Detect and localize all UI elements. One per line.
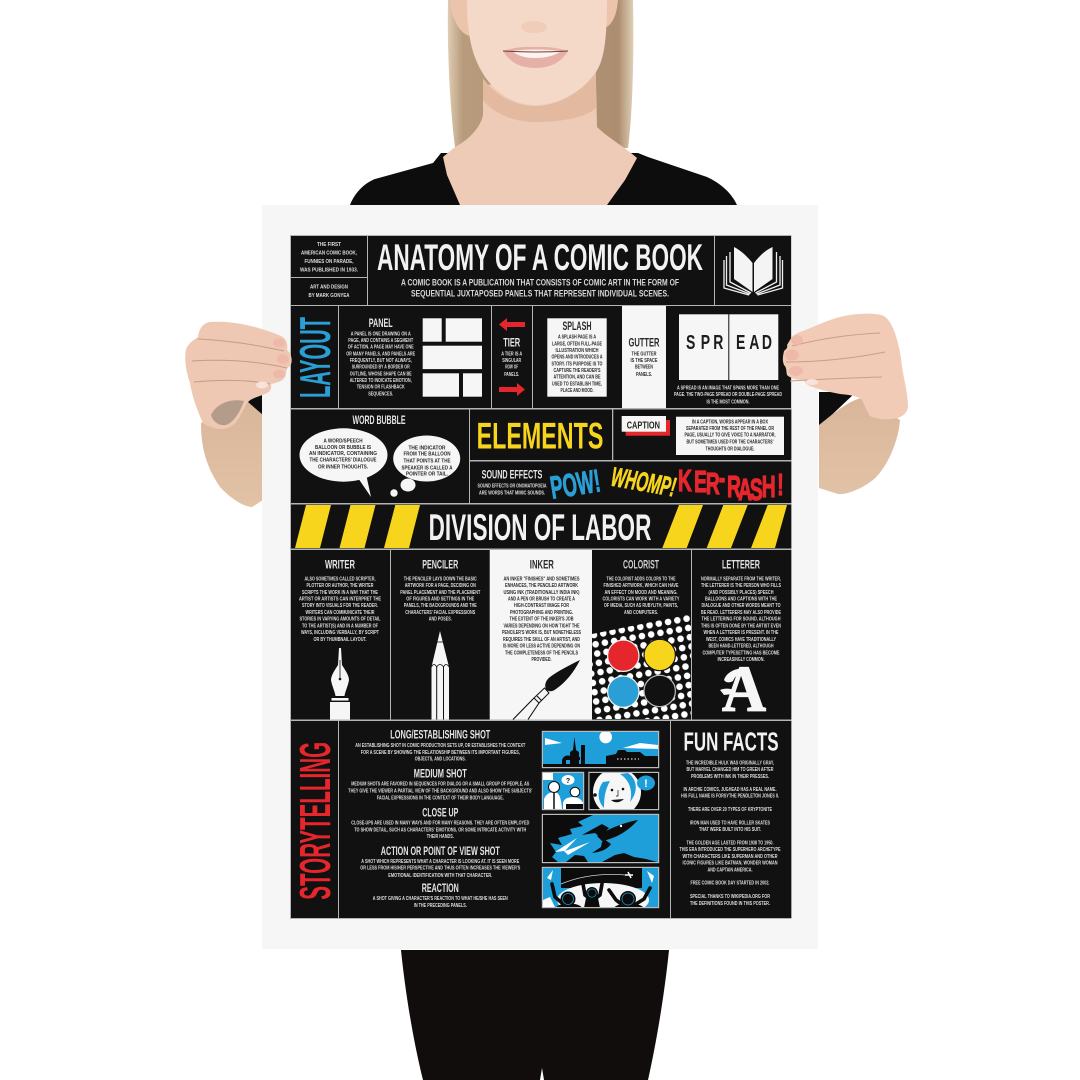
column: colorist: FINISHED ARTWORK, WHICH CAN HAVE: [604, 583, 679, 589]
shot: reaction: A SHOT GIVING A CHARACTER'S REACTION TO WHAT HE/SHE HAS SEEN: [373, 896, 508, 902]
layout: panel definition: SEQUENCES.: [368, 391, 393, 397]
header: first comic note: THE FIRST: [317, 242, 341, 248]
column: inker: IS MORE OR LESS ACTIVE DEPENDING ON: [503, 644, 580, 650]
column: writer: ALSO SOMETIMES CALLED SCRIPTER,: [304, 576, 376, 582]
subtitle: SEQUENTIAL JUXTAPOSED PANELS THAT REPRESENT INDIVIDUAL SCENES.: [411, 289, 669, 300]
elements: sound effects: [470, 462, 791, 507]
WHOMP: WHOMP!: [609, 462, 678, 503]
column: inker: THE COMPLETENESS OF THE PENCILS: [505, 650, 578, 656]
column: writer: WRITERS CAN COMMUNICATE THEIR: [306, 610, 374, 616]
header: first comic note: AMERICAN COMIC BOOK,: [301, 250, 357, 256]
layout: splash definition: ILLUSTRATION WHICH: [556, 348, 598, 354]
fun facts list: HIS FULL NAME IS FORSYTHE PENDLETON JONES II.: [681, 794, 779, 800]
storytelling: side label: [291, 721, 340, 918]
comic panel: astronaut close-up: [593, 773, 655, 809]
column: writer: TO THE ARTIST(S) AND IN A NUMBER OF: [302, 623, 378, 629]
layout: panel definition: OUTLINE, WHOSE SHAPE CAN BE: [350, 371, 412, 377]
column: colorist: [592, 550, 691, 720]
shot: long/establishing: FOR A SCENE BY SHOWING THE RELATIONSHIP BETWEEN ITS IMPORTANT FIGURES,: [361, 750, 520, 756]
column: letterer: [692, 550, 791, 726]
header: credit: [291, 278, 367, 305]
thought bubble: THE INDICATOR: [408, 445, 446, 451]
shot: reaction: [373, 883, 508, 909]
column: letterer: WHEN A LETTERER IS PRESENT. IN THE: [704, 630, 779, 636]
model: shirt: [350, 153, 737, 205]
shot: close up: TO SHOW DETAIL, SUCH AS CHARACTERS' EMOTIONS, OR SOME INTRICATE ACTIVITY WITH: [354, 827, 526, 833]
layout: spread definition: PAGE. THE TWO-PAGE SPREAD OR DOUBLE-PAGE SPREAD: [674, 392, 782, 398]
fun facts list: THE GOLDEN AGE LASTED FROM 1938 TO 1950.: [686, 840, 774, 846]
column: writer: STORIES IN VARYING AMOUNTS OF DETAIL: [300, 617, 381, 623]
layout: gutter definition: [622, 306, 666, 408]
column: letterer: THIS IS OFTEN DONE BY THE ARTIST EVEN: [701, 623, 781, 629]
poster grid frame: [290, 235, 792, 919]
column: letterer: THE LETTERER IS THE PERSON WHO FILLS: [701, 583, 781, 589]
elements: heading: [470, 410, 612, 460]
layout: splash definition: CAPTURE THE READER'S: [554, 368, 601, 374]
fun facts heading: FUN FACTS: [684, 727, 778, 757]
thought bubble: THAT POINTS AT THE: [404, 458, 451, 464]
layout: splash definition: SPLASH: [562, 321, 592, 333]
layout: tier definition: TIER: [503, 338, 521, 350]
speech bubble: OR INNER THOUGHTS.: [318, 465, 368, 471]
shot: medium: MEDIUM SHOTS ARE FAVORED IN SEQUENCES FOR DIALOG OR A SMALL GROUP OF PEOPLE, AS: [351, 782, 529, 788]
elements: word bubble panel: [291, 410, 469, 503]
column: inker: THE EXTENT OF THE INKER'S JOB: [510, 617, 574, 623]
column: letterer: INCREASINGLY COMMON.: [718, 657, 765, 663]
elements: word bubble panel: WORD BUBBLE: [352, 415, 406, 427]
shot: long/establishing: LONG/ESTABLISHING SHOT: [390, 729, 490, 741]
layout: tier definition: A TIER IS A: [501, 351, 522, 357]
halftone dots: [592, 614, 691, 720]
column: penciler: AND POSES.: [429, 617, 452, 623]
division of labor banner: [291, 504, 791, 548]
header: first comic note: [291, 236, 367, 277]
layout: gutter definition: THE GUTTER: [632, 351, 656, 357]
icon: panel layout: [423, 318, 482, 397]
shot: action or point of view: [360, 846, 520, 879]
column: inker: VARIES DEPENDING ON HOW TIGHT THE: [504, 623, 580, 629]
header: credit: ART AND DESIGN: [310, 284, 348, 290]
fun facts list: PROBLEMS WITH INK IN THEIR PRESSES.: [691, 774, 769, 780]
shot: long/establishing: OBJECTS, AND LOCATIONS.: [415, 756, 466, 762]
elements: heading: ELEMENTS: [477, 415, 603, 456]
column: letterer: DIALOGUE AND OTHER WORDS MEANT TO: [702, 603, 781, 609]
fun facts list: THAT WERE BUILT INTO HIS SUIT.: [699, 827, 761, 833]
column: letterer: BALLOONS AND CAPTIONS WITH THE: [705, 596, 777, 602]
elements: caption: IN A CAPTION, WORDS APPEAR IN A BOX: [692, 419, 768, 425]
layout: tier definition: PANELS.: [504, 372, 519, 378]
column: inker: REQUIRES THE SKILL OF AN ARTIST, AND: [503, 637, 580, 643]
fun facts list: SPECIAL THANKS TO WIKIPEDIA.ORG FOR: [690, 894, 770, 900]
fun facts list: THIS ERA INTRODUCED THE SUPERHERO ARCHETYPE: [680, 847, 781, 853]
column: colorist: THE COLORIST ADDS COLORS TO THE: [606, 576, 676, 582]
layout: gutter definition: BETWEEN: [635, 365, 653, 371]
column: letterer: THE LETTERING FOR SOUND, ALTHOUGH: [702, 617, 780, 623]
layout: splash definition: LARGE, OFTEN FULL-PAGE: [552, 341, 602, 347]
fun facts list: IRON MAN USED TO HAVE ROLLER SKATES: [690, 820, 770, 826]
comic panel: mission control: [543, 773, 583, 809]
poster sheet: [262, 205, 818, 949]
header: credit: BY MARK GONYEA: [308, 293, 350, 299]
shot: medium: MEDIUM SHOT: [414, 769, 467, 781]
layout: panel definition: PANEL: [369, 318, 393, 330]
column: penciler: [391, 550, 490, 720]
speech bubble: [300, 428, 388, 497]
layout: spread definition: A SPREAD IS AN IMAGE THAT SPANS MORE THAN ONE: [677, 385, 779, 391]
column: inker: PROVIDED.: [532, 657, 552, 663]
fun facts panel: [671, 721, 791, 918]
header: title panel: [368, 236, 714, 305]
icon: ink circles: [608, 639, 675, 707]
column: penciler: OF FIGURES AND SETTINGS IN THE: [406, 596, 474, 602]
model: hair: [448, 0, 633, 148]
shot: action or point of view: EMOTIONAL IDENTIFICATION WITH THAT CHARACTER.: [388, 873, 493, 879]
layout: panel definition: ALTERED TO INDICATE EMOTION,: [350, 378, 412, 384]
layout: side label: [291, 306, 340, 408]
layout: panel definition: TENSION OR FLASHBACK: [357, 385, 405, 391]
shot: action or point of view: ACTION OR POINT OF VIEW SHOT: [381, 846, 500, 858]
shot: medium: FACIAL EXPRESSIONS IN THE CONTEXT OF THEIR BODY LANGUAGE.: [377, 796, 504, 802]
comic panel: astronaut close-up: !: [644, 778, 648, 790]
column: penciler: PANEL PLACEMENT AND THE PLACEMENT: [400, 590, 481, 596]
division of labor banner: DIVISION OF LABOR: [429, 507, 651, 548]
layout: panel definition: A PANEL IS ONE DRAWING ON A: [351, 331, 411, 337]
column: writer: WAYS, INCLUDING VERBALLY, BY SCRIPT: [301, 630, 379, 636]
layout: spread definition: SPR: [686, 330, 724, 354]
column: writer: ARTIST OR ARTISTS CAN INTERPRET THE: [299, 596, 381, 602]
layout: splash definition: USED TO ESTABLISH TIME,: [552, 381, 602, 387]
elements: caption: CAPTION: [627, 419, 660, 431]
column: letterer: NORMALLY SEPARATE FROM THE WRITER,: [701, 576, 781, 582]
shot: reaction: REACTION: [422, 883, 459, 895]
storytelling: shots and comic strip: [339, 721, 670, 918]
thought bubble: POINTER OR TAIL.: [406, 472, 448, 478]
layout: splash definition: STORY. ITS PURPOSE IS TO: [552, 361, 603, 367]
thought bubble: FROM THE BALLOON: [404, 452, 450, 458]
speech bubble: THE CHARACTERS' DIALOGUE: [310, 458, 377, 464]
model: right hand: [783, 314, 908, 419]
thought bubble: [390, 436, 460, 497]
elements: sound effects: SOUND EFFECTS OR ONOMATOPOEIA: [478, 484, 546, 490]
layout: panel definition: PAGE, AND CONTAINS A SEGMENT: [348, 338, 414, 344]
speech bubble: A WORD/SPEECH: [324, 438, 362, 444]
column: letterer: LETTERER: [722, 559, 760, 571]
layout: gutter definition: GUTTER: [628, 338, 660, 350]
layout: panel definition: FREQUENTLY, BUT NOT ALWAYS,: [350, 358, 412, 364]
column: inker: PHOTOGRAPHING AND PRINTING.: [510, 610, 573, 616]
column: colorist: COLORISTS CAN WORK WITH A VARIETY: [602, 596, 680, 602]
fun facts list: WITH CHARACTERS LIKE SUPERMAN AND OTHER: [682, 854, 778, 860]
elements: caption: THOUGHTS OR DIALOGUE.: [706, 446, 755, 452]
column: inker: ENHANCES, THE PENCILED ARTWORK: [505, 583, 578, 589]
header: first comic note: WAS PUBLISHED IN 1933.: [300, 268, 358, 274]
fun facts list: BUT MARVEL CHANGED HIM TO GREEN AFTER: [686, 767, 774, 773]
layout: tier definition: [492, 306, 532, 408]
column: letterer: WEST, COMICS HAVE TRADITIONALLY: [706, 637, 776, 643]
column: inker: PENCILER'S WORK IS, BUT NONETHELESS: [502, 630, 581, 636]
fun facts list: AND CAPTAIN AMERICA.: [708, 868, 753, 874]
layout: side label: LAYOUT: [291, 317, 340, 398]
layout: panel definition: SURROUNDED BY A BORDER OR: [352, 365, 410, 371]
layout: spread definition: [666, 306, 791, 408]
column: penciler: PENCILER: [422, 559, 459, 571]
column: inker: USING INK (TRADITIONALLY INDIA INK): [504, 590, 580, 596]
shot: close up: [351, 808, 529, 840]
icon: pencil: [432, 631, 449, 720]
fun facts list: THE DEFINITIONS FOUND IN THIS POSTER.: [690, 901, 770, 907]
column: writer: OR BY THUMBNAIL LAYOUT.: [314, 637, 367, 643]
layout: panel definition: OR MANY PANELS, AND PANELS ARE: [346, 351, 415, 357]
layout: splash definition: [533, 306, 622, 408]
shot: long/establishing: [355, 729, 526, 762]
layout: spread definition: IS THE MOST COMMON.: [706, 400, 750, 406]
layout: splash definition: ATTENTION, AND CAN BE: [554, 375, 601, 381]
subtitle: A COMIC BOOK IS A PUBLICATION THAT CONSISTS OF COMIC ART IN THE FORM OF: [401, 278, 679, 288]
fun facts list: THE INCREDIBLE HULK WAS ORIGINALLY GRAY,: [686, 760, 774, 766]
arrow: left: [499, 318, 525, 331]
comic panel: crowd reaction: [543, 868, 658, 907]
model: face: [450, 0, 618, 105]
layout: tier definition: SINGULAR: [502, 358, 521, 364]
column: colorist: AN EFFECT ON MOOD AND MEANING.: [604, 590, 678, 596]
column: letterer: (AND POSSIBLY PLACES) SPEECH: [708, 590, 774, 596]
elements: sound effects: ARE WORDS THAT MIMIC SOUNDS.: [479, 490, 545, 496]
model: right arm: [819, 392, 900, 494]
comic panel: rocket in flight: [543, 815, 658, 862]
fun facts list: FREE COMIC BOOK DAY STARTED IN 2002.: [690, 881, 770, 887]
column: colorist: COLORIST: [623, 559, 659, 571]
layout: panel definition: [339, 306, 491, 408]
elements: caption: PAGE, USUALLY TO GIVE VOICE TO A NARRATOR,: [684, 433, 776, 439]
shot: medium: THEY GIVE THE VIEWER A PARTIAL VIEW OF THE BACKGROUND AND ALSO SHOW THE SUBJECTS': [348, 789, 533, 795]
model: left hand: [185, 322, 292, 429]
speech bubble: AN INDICATOR, CONTAINING: [309, 451, 377, 457]
icon: brush: [513, 660, 580, 720]
column: letterer: COMPUTER TYPESETTING HAS BECOME: [702, 650, 780, 656]
column: inker: INKER: [530, 559, 554, 571]
shot: action or point of view: OR LESS FROM HIS/HER PERSPECTIVE AND THUS OFTEN INCREASES THE VIEWER'S: [360, 866, 520, 872]
column: penciler: CHARACTERS' FACIAL EXPRESSIONS: [405, 610, 475, 616]
model: neck and chest: [443, 72, 637, 205]
column: letterer: BEEN HAND-LETTERED, ALTHOUGH: [708, 644, 774, 650]
shot: close up: CLOSE-UPS ARE USED IN MANY WAYS AND FOR MANY REASONS. THEY ARE OFTEN EMPLOYED: [351, 820, 529, 826]
column: penciler: PANELS, THE BACKGROUNDS AND THE: [404, 603, 477, 609]
layout: gutter definition: PANELS.: [636, 372, 652, 378]
column: writer: STORY INTO VISUALS FOR THE READER.: [302, 603, 378, 609]
layout: spread definition: EAD: [736, 330, 772, 354]
column: writer: SCRIPTS THE WORK IN A WAY THAT THE: [302, 590, 378, 596]
comic panel: rocket launch site: [543, 732, 658, 764]
header: open book icon: [715, 236, 791, 305]
column: inker: AN INKER "FINISHES" AND SOMETIMES: [504, 576, 580, 582]
POW: POW!: [548, 462, 603, 506]
speech bubble: BALLOON OR BUBBLE IS: [315, 445, 371, 451]
column: letterer: BE READ. LETTERERS MAY ALSO PROVIDE: [701, 610, 781, 616]
column: penciler: THE PENCILER LAYS DOWN THE BASIC: [404, 576, 477, 582]
elements: caption: [613, 410, 791, 460]
header: first comic note: FUNNIES ON PARADE,: [304, 259, 354, 265]
layout: panel definition: OF ACTION. A PAGE MAY HAVE ONE: [348, 345, 414, 351]
column: writer: [291, 550, 390, 720]
shot: close up: THEIR HANDS.: [427, 834, 454, 840]
thought bubble: SPEAKER IS CALLED A: [402, 465, 452, 471]
column: inker: AND A PEN OR BRUSH TO CREATE A: [508, 596, 575, 602]
elements: caption: BUT SOMETIMES USED FOR THE CHARACTERS': [686, 439, 774, 445]
arrow: right: [499, 383, 525, 396]
icon: blackletter A: A: [722, 653, 766, 726]
column: writer: WRITER: [325, 559, 355, 571]
shot: long/establishing: AN ESTABLISHING SHOT IN COMIC PRODUCTION SETS UP, OR ESTABLISHES THE CONTEXT: [355, 743, 526, 749]
subtitle: [401, 278, 679, 300]
model: legs: [401, 950, 669, 1080]
column: inker: HIGH-CONTRAST IMAGE FOR: [514, 603, 569, 609]
storytelling: side label: STORYTELLING: [291, 742, 340, 900]
fun facts list: THERE ARE OVER 20 TYPES OF KRYPTONITE: [688, 807, 772, 813]
layout: gutter definition: IS THE SPACE: [630, 358, 658, 364]
elements: caption: SEPARATED FROM THE REST OF THE PANEL OR: [686, 426, 774, 432]
shot: action or point of view: A SHOT WHICH REPRESENTS WHAT A CHARACTER IS LOOKING AT. IT IS SEEN MORE: [361, 859, 519, 865]
title: ANATOMY OF A COMIC BOOK: [377, 236, 703, 278]
column: inker: [490, 550, 592, 720]
model: left arm: [201, 395, 263, 507]
column: colorist: AND COMPUTERS.: [624, 610, 658, 616]
layout: tier definition: ROW OF: [505, 365, 519, 371]
shot: close up: CLOSE UP: [422, 808, 458, 820]
shot: reaction: IN THE PRECEDING PANELS.: [414, 903, 467, 909]
column: penciler: ARTWORK FOR A PAGE, DECIDING ON: [405, 583, 476, 589]
layout: splash definition: OPENS AND INTRODUCES A: [552, 355, 602, 361]
fun facts list: [680, 760, 781, 907]
icon: fountain pen nib: [330, 648, 350, 720]
layout: splash definition: A SPLASH PAGE IS A: [558, 335, 596, 341]
fun facts list: IN ARCHIE COMICS, JUGHEAD HAS A REAL NAME.: [684, 787, 777, 793]
elements: sound effects: SOUND EFFECTS: [482, 469, 543, 481]
KER-RASH: KER-RASH!: [678, 462, 784, 507]
fun facts list: ICONIC FIGURES LIKE BATMAN, WONDER WOMAN: [682, 861, 778, 867]
column: writer: PLOTTER OR AUTHOR, THE WRITER: [306, 583, 374, 589]
comic panel: mission control: ?: [566, 778, 570, 785]
column: colorist: OF MEDIA, SUCH AS RUBYLITH, PAINTS,: [604, 603, 678, 609]
layout: splash definition: PLACE AND MOOD.: [560, 388, 594, 394]
shot: medium: [348, 769, 533, 802]
